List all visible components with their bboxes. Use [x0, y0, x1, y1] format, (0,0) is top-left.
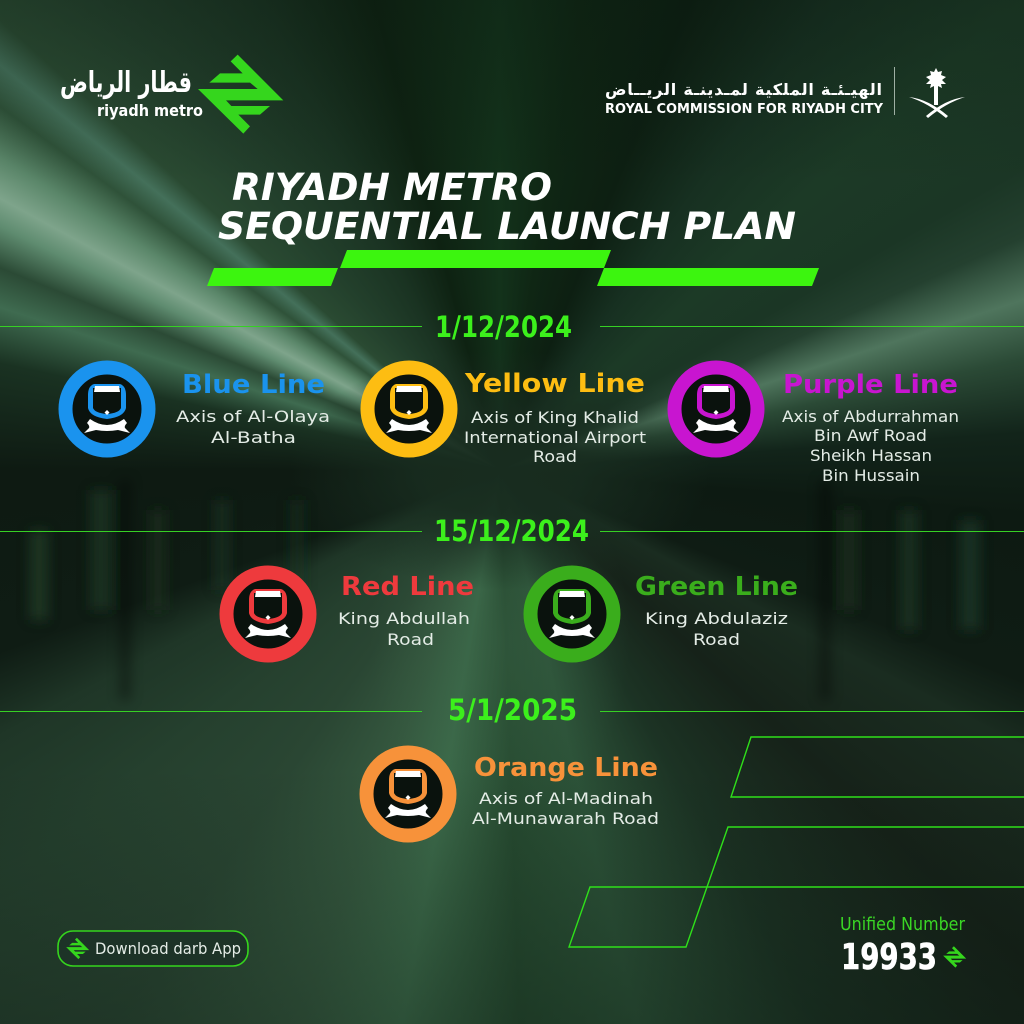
title: RIYADH METRO	[232, 166, 552, 209]
logo: riyadh metro: riyadh metro	[97, 101, 203, 120]
line card: blue: Al-Batha	[211, 428, 296, 447]
logo: riyadh metro	[60, 55, 283, 134]
line card: blue	[66, 368, 330, 450]
line card: red	[226, 572, 474, 656]
line card: green	[530, 572, 798, 656]
logo: royal commission for riyadh city: الهيـئـة الملكية لمـدينـة الريــاض	[605, 80, 882, 99]
unified number: 19933	[841, 937, 937, 978]
line card: purple: Purple Line	[783, 370, 958, 400]
unified number	[840, 914, 966, 978]
date heading: 1/12/2024: 1/12/2024	[435, 310, 572, 344]
line card: blue: Blue Line	[182, 370, 325, 400]
line card: orange: Al-Munawarah Road	[472, 809, 659, 828]
line card: yellow: Road	[533, 447, 577, 466]
logo: riyadh metro: قطار الرياض	[60, 65, 192, 99]
button: download darb app	[58, 931, 248, 966]
background: blurred window panels	[30, 480, 980, 700]
line card: blue: Axis of Al-Olaya	[176, 407, 330, 426]
line card: orange	[366, 752, 659, 836]
title underline bars	[207, 250, 819, 286]
line card: green: King Abdulaziz	[645, 609, 788, 628]
line card: purple: Bin Hussain	[822, 466, 920, 485]
line card: orange: Axis of Al-Madinah	[479, 789, 653, 808]
line card: orange: Orange Line	[474, 753, 658, 783]
line card: red: King Abdullah	[338, 609, 470, 628]
button: download darb app: Download darb App	[95, 939, 241, 958]
line card: yellow: Axis of King Khalid	[471, 408, 639, 427]
line card: purple: Axis of Abdurrahman	[782, 407, 959, 426]
line card: purple	[674, 368, 959, 485]
title	[218, 166, 796, 248]
line card: green: Road	[693, 630, 740, 649]
line card: purple: Sheikh Hassan	[810, 446, 932, 465]
line card: green: Green Line	[635, 572, 798, 602]
line card: red: Red Line	[341, 572, 474, 602]
decorative green outline parallelograms	[569, 737, 1024, 947]
line card: red: Road	[387, 630, 434, 649]
line card: yellow: International Airport	[464, 428, 646, 447]
icon: palm and crossed swords emblem	[909, 68, 965, 118]
line card: yellow: Yellow Line	[464, 369, 645, 399]
logo: royal commission for riyadh city	[605, 67, 895, 117]
logo: royal commission for riyadh city: ROYAL COMMISSION FOR RIYADH CITY	[605, 102, 884, 117]
unified number: Unified Number	[840, 914, 966, 935]
date heading: 5/1/2025: 5/1/2025	[448, 693, 577, 727]
title: SEQUENTIAL LAUNCH PLAN	[218, 205, 796, 248]
line card: yellow	[368, 368, 646, 466]
date heading: 15/12/2024: 15/12/2024	[434, 514, 589, 548]
line card: purple: Bin Awf Road	[814, 426, 927, 445]
